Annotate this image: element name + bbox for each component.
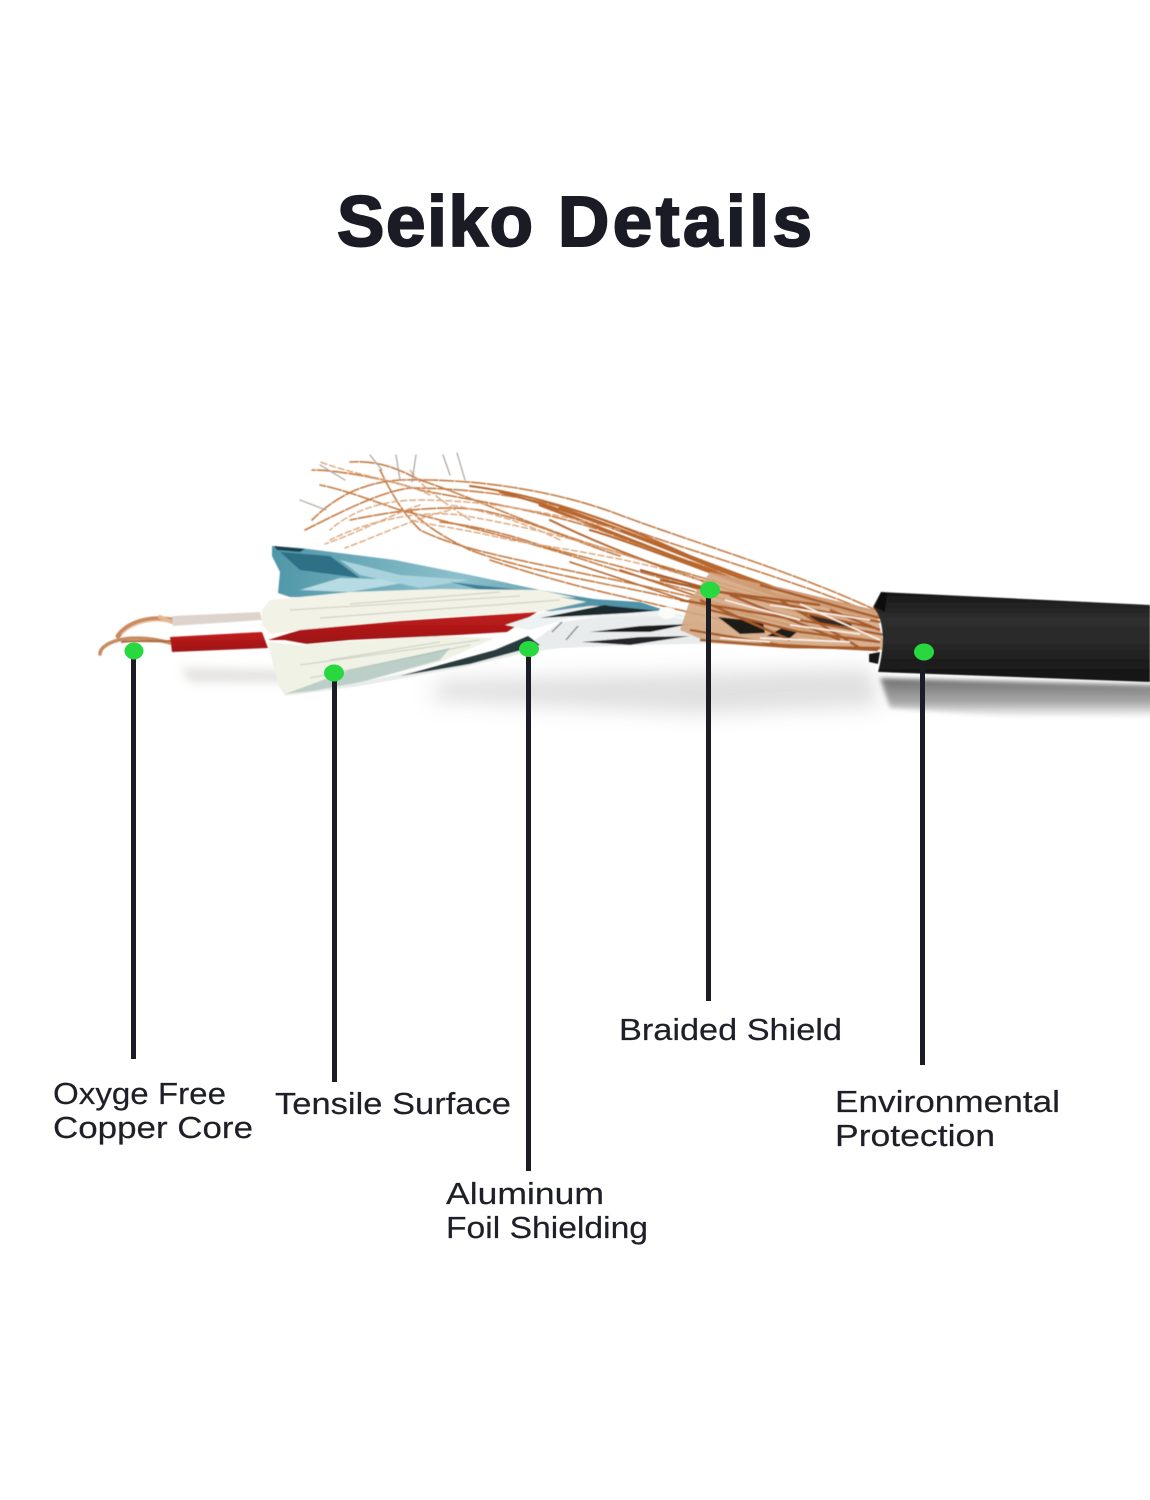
braided shield neck (640, 570, 885, 650)
callout: aluminum foil shielding (446, 641, 648, 1245)
callout: aluminum foil shielding: Foil Shielding (446, 1210, 648, 1245)
callout: oxygen free copper core: Copper Core (53, 1110, 253, 1145)
callout: environmental protection: Environmental (835, 1084, 1060, 1119)
silver foil shielding (285, 597, 730, 696)
callout: oxygen free copper core: Oxyge Free (53, 1076, 226, 1111)
red wire inside fibre (268, 612, 537, 644)
callout: tensile surface: Tensile Surface (275, 1086, 511, 1121)
cable shadow (180, 668, 1150, 718)
cable photo illustration (100, 453, 1150, 718)
blue foil layer (272, 546, 650, 612)
red insulated wire (170, 632, 268, 652)
black outer jacket (869, 592, 1150, 682)
copper braid strands fanning out (300, 453, 880, 640)
copper core wires (100, 617, 172, 654)
grey insulated wire (172, 612, 262, 626)
dense upper copper band (470, 486, 876, 640)
callout: braided shield (619, 582, 842, 1047)
callout: aluminum foil shielding: Aluminum (446, 1176, 604, 1211)
callout: tensile surface (275, 664, 511, 1121)
title: Details (558, 183, 812, 262)
callout: environmental protection (835, 644, 1060, 1153)
white fibre tensile layer (262, 589, 590, 696)
callout: environmental protection: Protection (835, 1118, 995, 1153)
callout: oxygen free copper core (53, 642, 253, 1145)
callout: braided shield: Braided Shield (619, 1012, 842, 1047)
title (337, 183, 812, 262)
title: Seiko (337, 183, 533, 262)
